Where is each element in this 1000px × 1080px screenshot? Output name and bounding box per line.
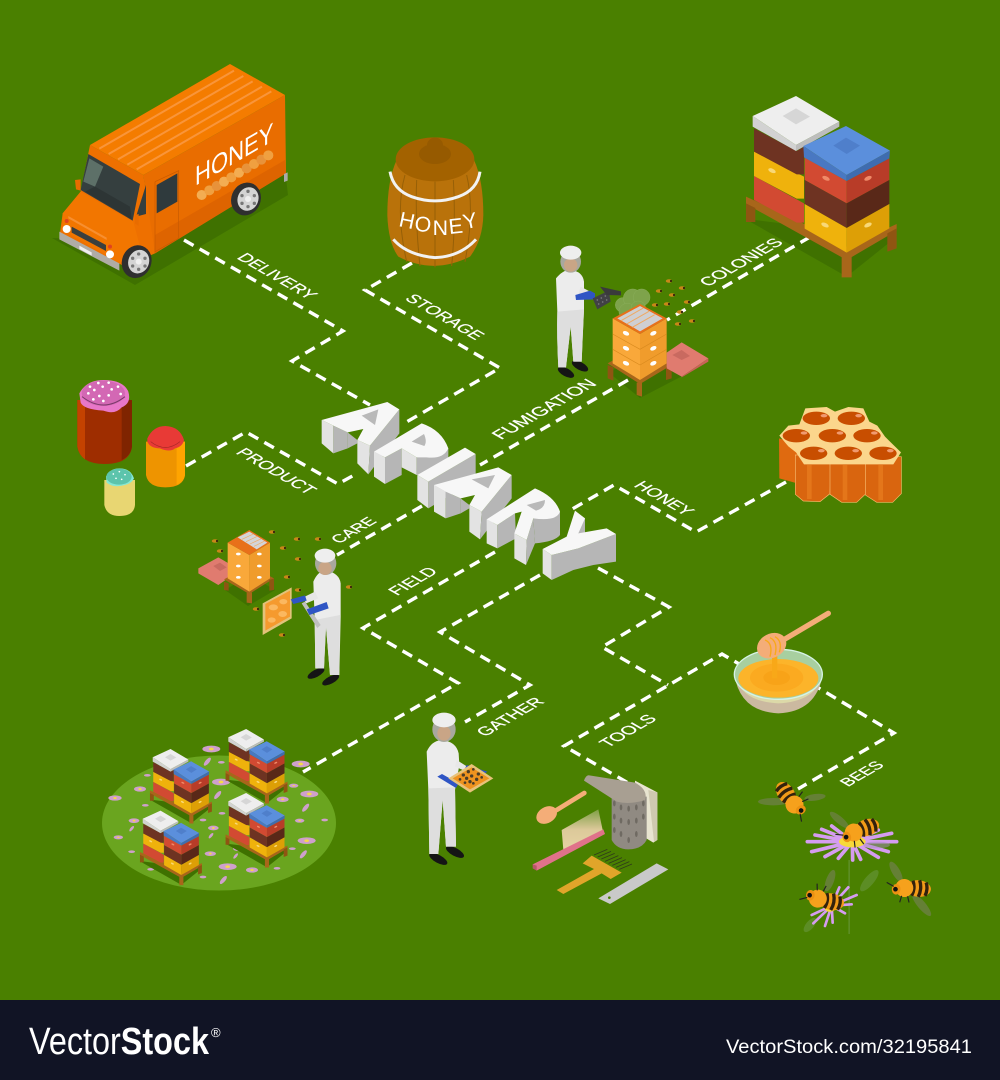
apiary 3D title: [322, 402, 616, 580]
letter P: [374, 423, 448, 484]
keeper boots: [428, 851, 449, 867]
letter A: [322, 402, 399, 474]
bowl body: [734, 674, 823, 713]
field colony bottom left: [140, 811, 202, 885]
keeper suit: [313, 571, 341, 675]
beekeeper with smoker and hive: [556, 246, 708, 397]
keeper veil and hat: [432, 717, 456, 742]
honey barrel: [387, 137, 483, 267]
ground shadows: [52, 170, 897, 606]
honey text on van: HONEY: [195, 117, 274, 192]
rear bumper: [284, 172, 288, 182]
label: storage: STORAGE: [401, 291, 489, 342]
field of hives and flowers: [102, 729, 336, 890]
smoke hive stand: [608, 345, 672, 384]
van front: [60, 145, 155, 267]
barrel top: [396, 137, 474, 181]
label: colonies: COLONIES: [695, 236, 787, 289]
care hive boxes: [228, 543, 249, 592]
smoke: [615, 289, 650, 320]
windshield: [81, 154, 140, 221]
orange jar: [146, 426, 185, 487]
dipper: [783, 613, 828, 640]
keeper veil and hat: [315, 552, 336, 575]
large flower: [807, 826, 897, 860]
honey surface: [738, 659, 818, 698]
honeycomb band: [197, 150, 273, 200]
van side: [143, 95, 286, 253]
bumper: [59, 232, 119, 271]
honey jars: [77, 380, 185, 516]
front wheel: [117, 241, 157, 283]
flying bees by hive: [652, 279, 695, 326]
footer logo: VectorStock: [29, 1021, 210, 1063]
keeper boots: [306, 666, 326, 681]
smoker: [593, 291, 611, 309]
van roof: [90, 64, 285, 175]
uncapping tool: [557, 849, 632, 894]
comb front walls: [795, 455, 832, 502]
large jar: [77, 380, 132, 464]
keeper hive tool: [302, 602, 321, 628]
field colony top right: [226, 729, 288, 804]
label: gather: GATHER: [472, 695, 549, 739]
small flower: [812, 887, 857, 926]
label: product: PRODUCT: [232, 445, 321, 497]
keeper arm and glove: [578, 287, 593, 298]
comb back wall: [779, 438, 800, 483]
keeper suit: [556, 270, 584, 367]
tray of bees: [448, 764, 493, 793]
bees and flowers: [758, 774, 934, 934]
rear wheel: [226, 178, 266, 220]
side mirror windows: [136, 185, 146, 217]
colonies hives: [746, 96, 897, 277]
field ellipse: [102, 756, 336, 890]
honey bowl with dipper: [734, 613, 828, 713]
footer registered mark: ®: [211, 1025, 221, 1040]
bee two: [828, 809, 890, 852]
bee four: [885, 860, 934, 918]
field flowers: [108, 746, 328, 885]
keeper gloves: [437, 774, 459, 788]
beekeeper gathering with tray: [427, 713, 493, 867]
connector lines: [184, 237, 894, 789]
beekeeper caring with frame and hive: [198, 530, 341, 688]
keeper veil and hat: [560, 251, 581, 273]
label: fumigation: FUMIGATION: [487, 376, 601, 442]
smoke hive boxes: [613, 318, 640, 380]
label: tools: TOOLS: [595, 712, 661, 750]
grille: [72, 227, 106, 251]
honey frame: [263, 587, 292, 635]
label: honey: HONEY: [630, 478, 698, 518]
brush: [533, 809, 605, 871]
delivery van: [59, 64, 288, 283]
keeper suit: [427, 740, 459, 854]
small jar: [104, 468, 135, 516]
letter Y: [543, 511, 616, 580]
labels: [232, 236, 888, 789]
letter R: [487, 488, 560, 565]
label: care: CARE: [328, 515, 381, 546]
stems and leaves: [801, 860, 881, 934]
comb tops: [779, 407, 901, 464]
smoke hive lid: [667, 342, 708, 377]
barrel hoops: [390, 172, 480, 201]
smoker tool: [584, 775, 657, 849]
honeycomb: [779, 407, 901, 502]
barrel body: [387, 160, 483, 266]
bee one: [758, 774, 826, 824]
honey dipper tool: [533, 793, 584, 827]
bowl rim: [734, 649, 822, 699]
barrel text: HONEY: [397, 207, 480, 240]
barrel staves: [400, 175, 470, 267]
keeper arm: [303, 592, 318, 603]
label: delivery: DELIVERY: [233, 250, 321, 302]
bee three: [799, 869, 847, 912]
footer bar: [0, 1000, 1000, 1080]
field colony top left: [150, 749, 212, 824]
beekeeping tools: [533, 775, 668, 904]
footer image id: VectorStock.com/32195841: [726, 1037, 972, 1058]
care hive stand: [224, 565, 274, 594]
label: field: FIELD: [384, 564, 442, 598]
keeper boots: [556, 365, 576, 380]
comb honey cells: [783, 412, 897, 460]
door window: [157, 173, 177, 213]
field colony bottom right: [226, 793, 288, 868]
care hive lid: [198, 557, 240, 585]
label: bees: BEES: [837, 759, 888, 789]
keeper gloves: [291, 595, 307, 604]
letter A second: [434, 467, 512, 539]
keeper arm: [455, 760, 470, 772]
honey drip: [772, 652, 777, 678]
letter I: [417, 448, 476, 508]
headlights: [63, 225, 71, 233]
hive tool: [598, 863, 668, 904]
flying bees around care hive: [212, 530, 352, 637]
